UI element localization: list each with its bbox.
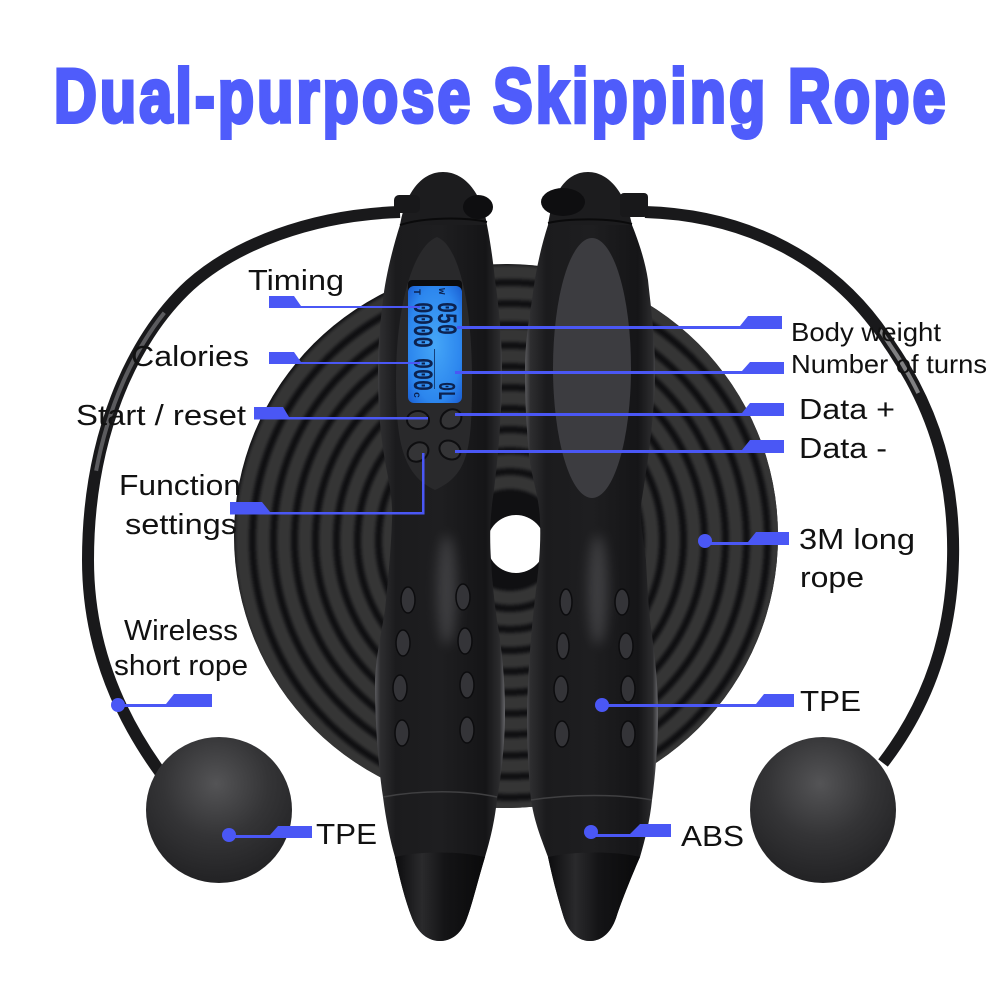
left ball [146,737,292,883]
label: Function: Function [119,470,241,502]
callout: wireless rope [111,694,212,712]
label: Start / reset: Start / reset [76,400,246,432]
LCD screen: c [410,392,421,398]
coil centre hole [487,515,545,573]
left short rope [88,212,400,772]
LCD screen: T [410,289,421,295]
callout: start reset [254,407,428,420]
label: Body weight: Body weight [791,317,942,347]
grip dots [554,589,635,747]
rope coil [234,264,778,808]
handle inset panel [553,238,631,498]
callout: body weight [457,316,782,329]
LCD screen: 000 [405,358,436,391]
handle tip [548,852,640,941]
LCD screen [405,280,462,403]
callout: function settings [230,453,424,514]
callout: 3M rope [698,532,789,548]
label: Calories: Calories [131,341,249,373]
callout: TPE handle [595,694,794,712]
label: settings: settings [125,509,237,541]
grip highlight [588,535,608,645]
label: ABS: ABS [681,821,744,853]
label: rope: rope [800,562,864,594]
label: 3M long: 3M long [799,524,915,556]
label: TPE handle: TPE [800,686,861,718]
LCD screen: 0L [431,382,458,400]
LCD screen: 0000 [405,302,436,348]
right handle [525,172,658,941]
callout: ABS [584,824,671,839]
LCD screen: 050 [429,302,460,335]
callout lines [111,296,794,842]
label: Number of turns: Number of turns [791,349,987,379]
callout: data plus [455,403,784,416]
handle tip [395,852,485,941]
label: Data +: Data + [799,394,895,426]
grip highlight [437,535,457,645]
callout: number of turns [455,362,784,374]
buttons [404,405,465,466]
label: Timing: Timing [248,265,344,297]
label: Wireless: Wireless [124,615,238,647]
label: short rope: short rope [114,650,248,682]
label: TPE ball: TPE [316,819,377,851]
title: Dual-purpose Skipping Rope [54,54,946,139]
right short rope [645,212,953,763]
callout: TPE ball [222,826,312,842]
callout: calories [269,352,420,364]
callout: data minus [455,440,784,453]
grip dots [393,584,474,746]
label: Data -: Data - [799,433,887,465]
LCD screen: w [435,288,447,295]
handle inset panel [396,237,472,490]
callout: timing [269,296,420,308]
left handle [375,172,505,941]
right ball [750,737,896,883]
